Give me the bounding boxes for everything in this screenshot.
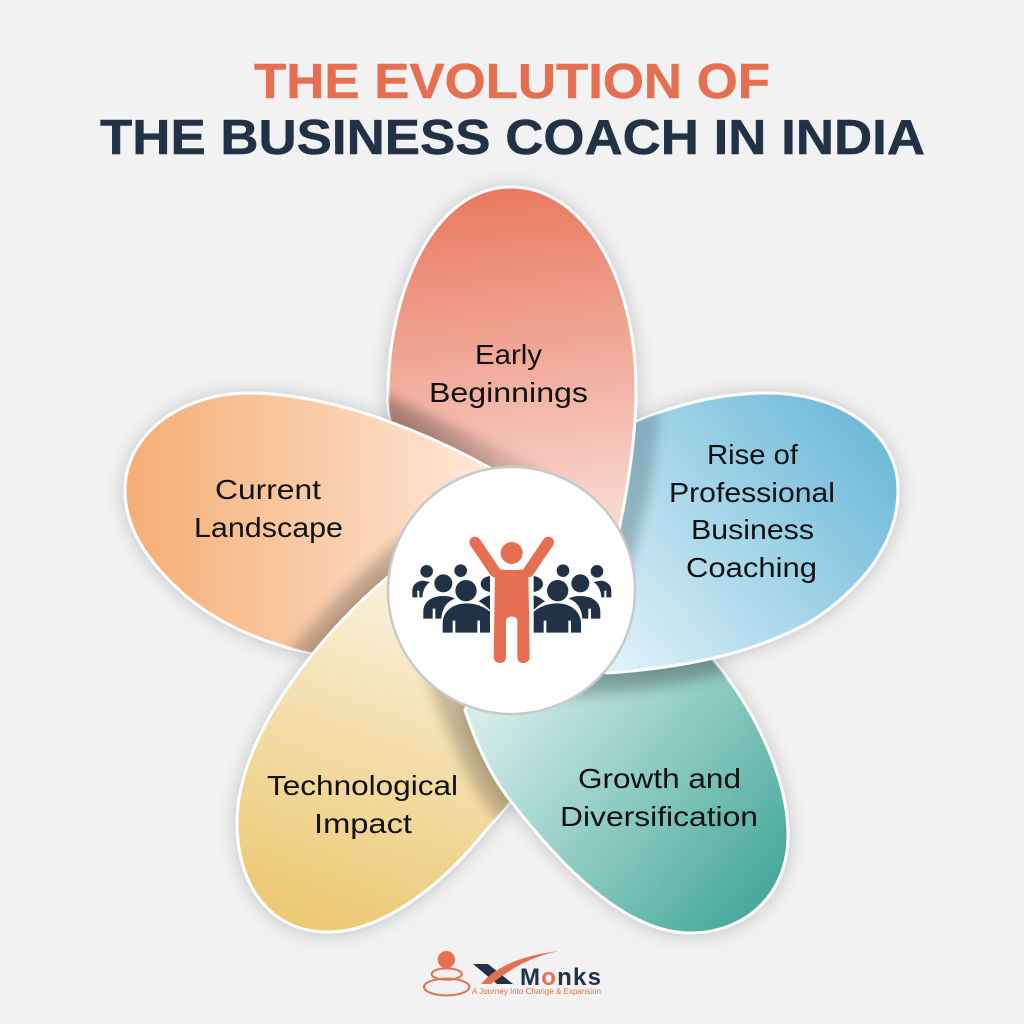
label: early beginnings: Beginnings (429, 377, 588, 408)
label: technological impact (267, 770, 458, 839)
icon: x mark with swoosh (473, 951, 559, 984)
icon: stacked stones (424, 951, 469, 995)
panel: growth and diversification petal (460, 658, 798, 944)
panel: current landscape petal (125, 393, 520, 675)
icon: leader (475, 542, 548, 663)
label: rise of professional business coaching (669, 439, 835, 583)
label: growth and diversification: Diversification (560, 801, 758, 832)
label: technological impact: Impact (314, 808, 412, 839)
label: current landscape (194, 474, 343, 543)
label: growth and diversification: Growth and (578, 763, 741, 794)
label: current landscape: Landscape (194, 512, 343, 543)
title: THE EVOLUTION OF (254, 55, 770, 109)
label: early beginnings: Early (475, 339, 542, 370)
icon: leader with raised arms and team (412, 542, 611, 663)
label: rise of professional business coaching: Professional (669, 477, 835, 508)
panel: rise of professional business coaching petal (600, 384, 908, 680)
panel: early beginnings petal (378, 178, 646, 483)
label: rise of professional business coaching: Rise of (707, 439, 798, 470)
title: THE BUSINESS COACH IN INDIA (100, 111, 925, 165)
title (100, 55, 925, 165)
icon: team right (534, 564, 611, 633)
label: rise of professional business coaching: Business (691, 514, 814, 545)
label: technological impact: Technological (267, 770, 458, 801)
label: current landscape: Current (215, 474, 321, 505)
icon: team left (412, 564, 490, 633)
logo: xmonks (424, 951, 601, 996)
logo tagline: A Journey Into Change & Expansion (472, 987, 601, 996)
label: growth and diversification (560, 763, 758, 832)
logo wordmark: Monks (520, 964, 601, 991)
label: early beginnings (429, 339, 588, 408)
panel: technological impact petal (227, 570, 516, 942)
label: rise of professional business coaching: Coaching (686, 552, 817, 583)
center circle (388, 467, 635, 714)
